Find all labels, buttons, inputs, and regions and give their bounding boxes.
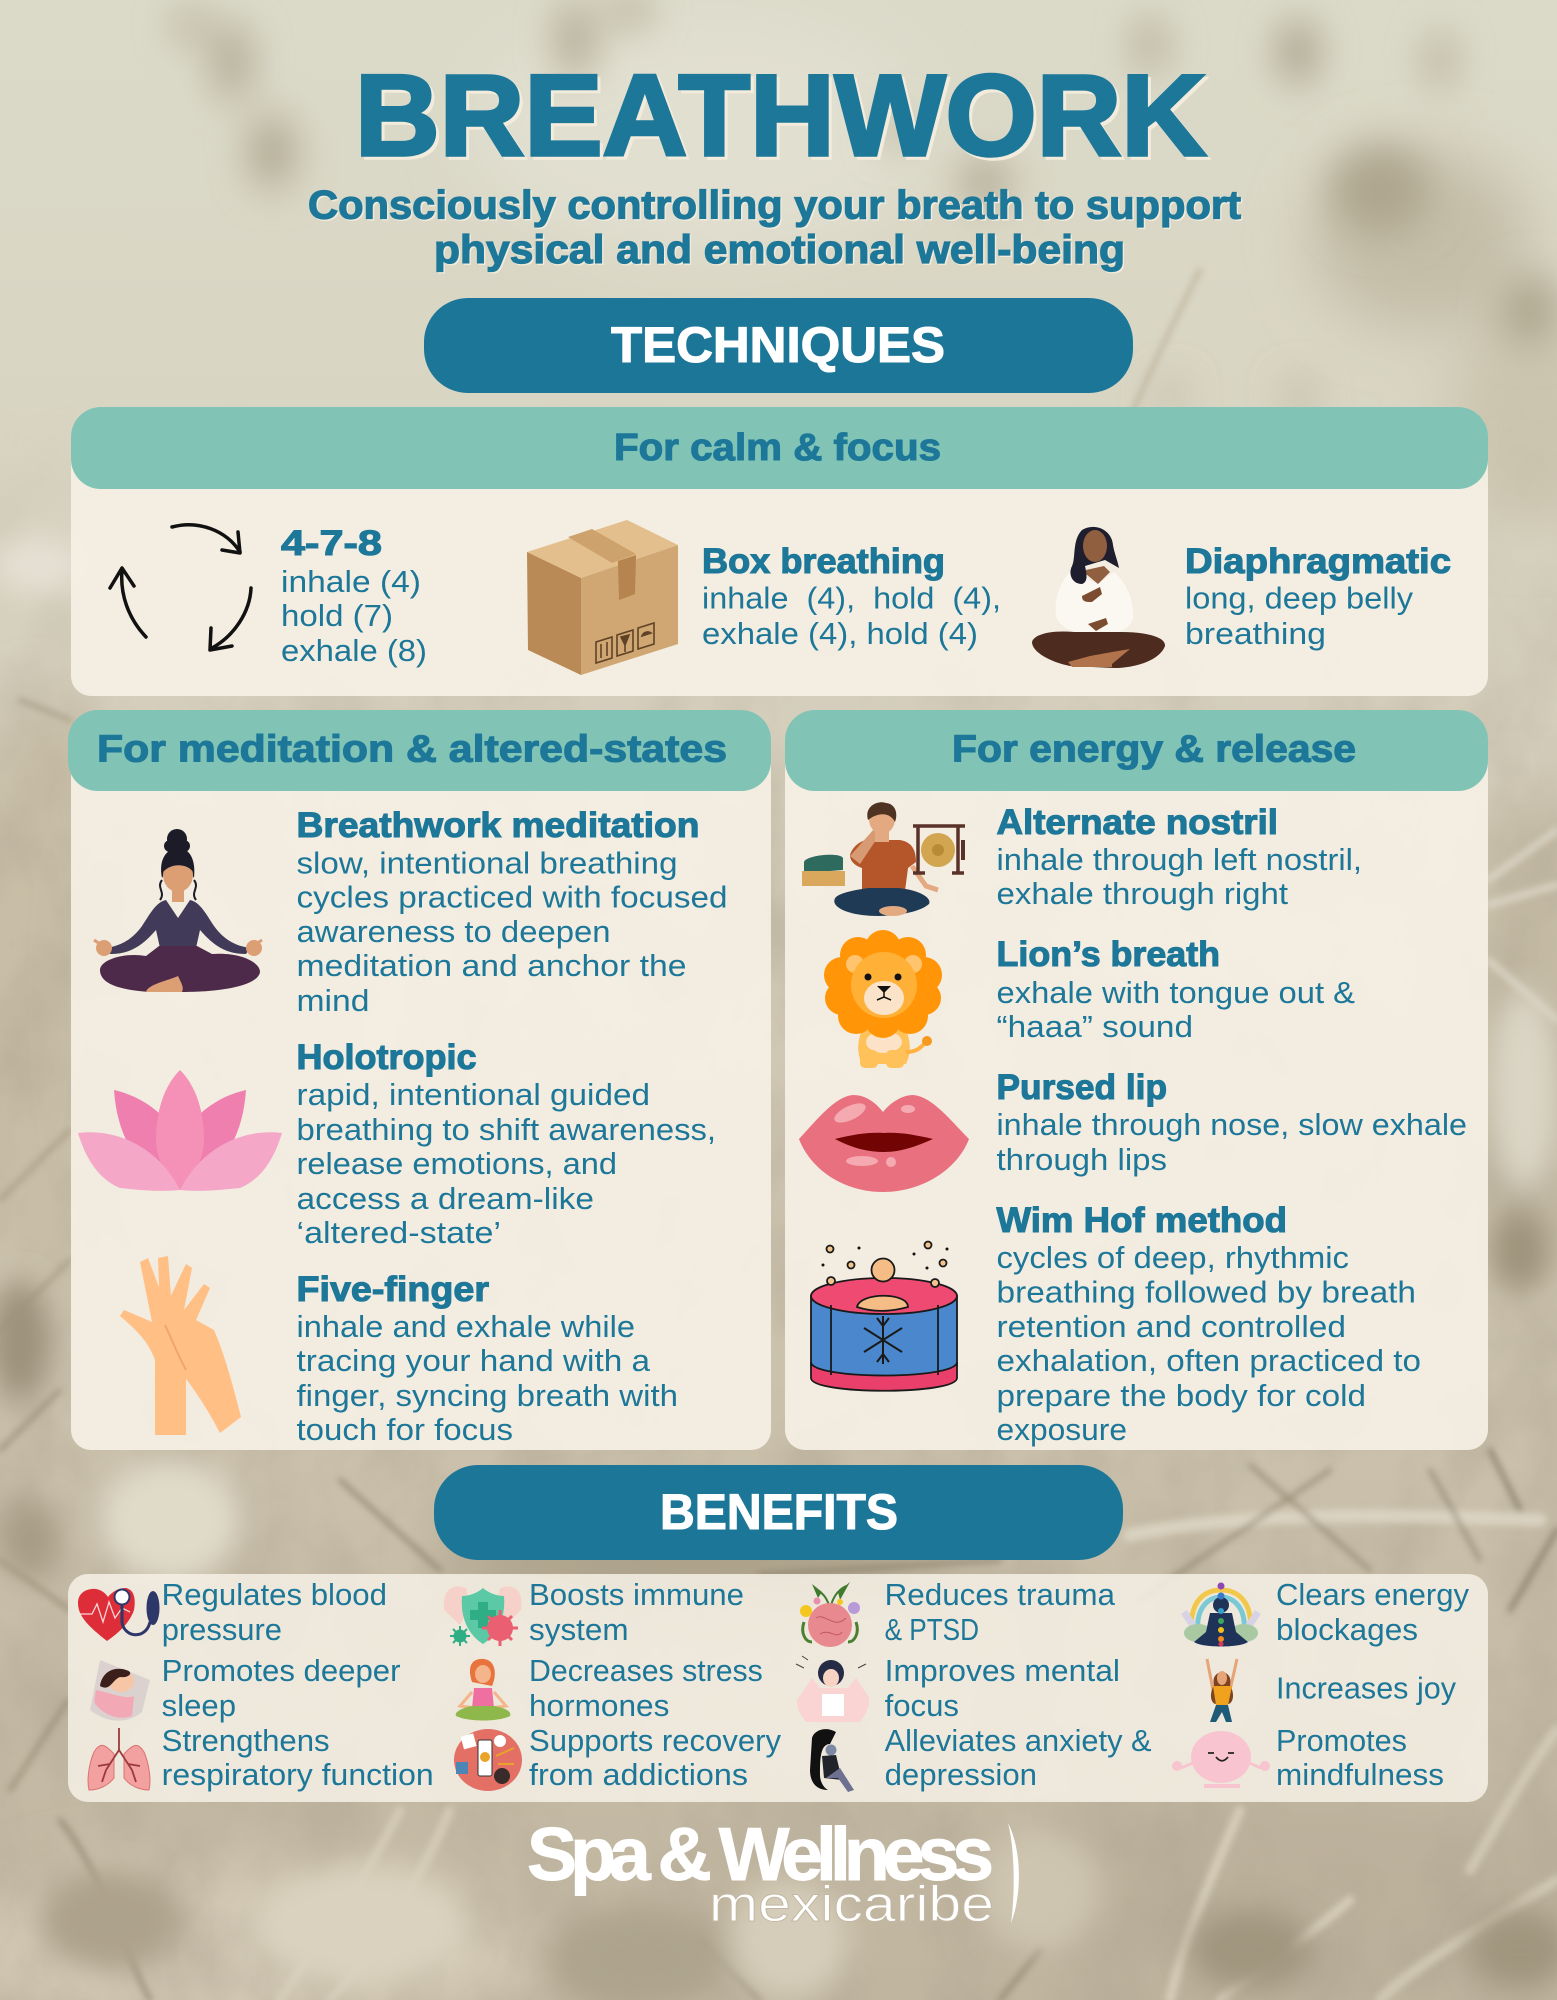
text: regulates blood pressure: [162, 1577, 387, 1647]
text: holotropic: release emotions, and: [296, 1146, 617, 1181]
panel: for meditation and altered-states: [68, 710, 771, 1450]
text: five-finger: touch for focus: [296, 1412, 513, 1447]
icon: immune shield: [444, 1586, 522, 1646]
text: lion's breath: exhale with tongue out &: [996, 975, 1355, 1010]
text: strengthens respiratory function: [162, 1723, 434, 1792]
text: pursed lip: inhale through nose, slow exhale: [996, 1107, 1467, 1142]
icon: meditating brain: [1172, 1731, 1270, 1786]
text: five-finger: tracing your hand with a: [296, 1343, 651, 1378]
subtitle: physical and emotional well-being: [434, 228, 1125, 272]
text: alternate nostril: inhale through left nostril,: [996, 842, 1362, 877]
subtitle: [308, 184, 1242, 274]
icon: brain with flowers: [800, 1582, 860, 1647]
text: wim hof method: exposure: [996, 1412, 1127, 1447]
subtitle: physical and emotional well-being: [436, 230, 1126, 274]
icon: heart with blood pressure cuff: [78, 1588, 160, 1641]
text: alleviates anxiety & depression: [885, 1723, 1152, 1792]
text: promotes deeper sleep: [162, 1653, 400, 1723]
text: promotes mindfulness: [1276, 1723, 1444, 1792]
text: reduces trauma & ptsd: Reduces trauma: [885, 1577, 1116, 1612]
panel header: for energy and release: [785, 710, 1488, 791]
icon: chakra figure: [1184, 1582, 1258, 1646]
text: holotropic: breathing to shift awareness,: [296, 1112, 716, 1147]
text: box breathing: inhale (4), hold (4),: [702, 580, 1001, 616]
text: regulates blood pressure: pressure: [162, 1612, 282, 1647]
text: improves mental focus: Improves mental: [885, 1653, 1120, 1688]
text: wim hof method: Wim Hof method: [996, 1201, 1287, 1240]
text: wim hof method: prepare the body for cold: [996, 1378, 1366, 1413]
text: promotes deeper sleep: Promotes deeper: [162, 1653, 400, 1688]
logo: spa and wellness mexicaribe: mexicaribe: [709, 1876, 994, 1932]
text: boosts immune system: system: [529, 1612, 629, 1647]
text: lion's breath: [996, 935, 1355, 1044]
panel: for energy and release: [785, 710, 1488, 1450]
text: breathwork meditation: meditation and anchor the: [296, 948, 686, 983]
icon: lungs: [88, 1728, 150, 1790]
text: boosts immune system: [529, 1577, 744, 1647]
icon: sleeping person: [90, 1660, 150, 1721]
text: wim hof method: exhalation, often practiced to: [996, 1343, 1421, 1378]
text: pursed lip: [996, 1068, 1467, 1177]
title: BREATHWORK: [355, 52, 1206, 180]
text: diaphragmatic: long, deep belly: [1185, 580, 1414, 616]
text: increases joy: Increases joy: [1276, 1671, 1456, 1706]
title: BREATHWORK: [358, 55, 1209, 183]
panel: for calm and focus: [71, 407, 1488, 696]
text: supports recovery from addictions: [529, 1723, 781, 1792]
icon: meditating woman: [94, 829, 262, 992]
text: five-finger: inhale and exhale while: [296, 1309, 635, 1344]
section pill: benefits: [434, 1465, 1123, 1560]
text: clears energy blockages: [1276, 1577, 1469, 1647]
icon: cardboard box: [527, 520, 678, 675]
text: wim hof method: cycles of deep, rhythmic: [996, 1240, 1349, 1275]
text: promotes deeper sleep: sleep: [162, 1688, 236, 1723]
icon: man alternate nostril breathing: [802, 802, 965, 916]
icon: hands tracing fingers: [120, 1256, 241, 1435]
panel header: for energy and release: For energy & release: [952, 728, 1356, 770]
panel header: for meditation and altered-states: For meditation & altered-states: [97, 728, 727, 770]
text: breathwork meditation: slow, intentional breathing: [296, 846, 678, 880]
section pill: benefits: BENEFITS: [660, 1484, 898, 1540]
text: alleviates anxiety & depression: depression: [885, 1757, 1037, 1792]
text: alternate nostril: exhale through right: [996, 876, 1288, 911]
text: alternate nostril: [996, 803, 1362, 911]
text: wim hof method: retention and controlled: [996, 1309, 1346, 1344]
icon: stressed woman: [796, 1656, 869, 1722]
text: box breathing: Box breathing: [702, 542, 945, 581]
text: boosts immune system: Boosts immune: [529, 1577, 744, 1612]
text: promotes mindfulness: mindfulness: [1276, 1757, 1444, 1792]
text: 4-7-8: inhale (4): [281, 564, 421, 599]
icon: cycle arrows: [110, 525, 251, 650]
text: lion's breath: “haaa” sound: [996, 1009, 1193, 1044]
panel header: for meditation and altered-states: [68, 710, 771, 791]
text: 4-7-8: exhale (8): [281, 633, 427, 668]
icon: cold plunge tub: [811, 1242, 957, 1391]
icon: lotus flower: [78, 1070, 282, 1191]
text: wim hof method: breathing followed by breath: [996, 1274, 1416, 1310]
text: lion's breath: Lion’s breath: [996, 935, 1220, 974]
text: decreases stress hormones: hormones: [529, 1688, 669, 1723]
text: diaphragmatic: Diaphragmatic: [1185, 542, 1451, 581]
text: pursed lip: through lips: [996, 1142, 1167, 1177]
icon: anxious person with dark shadow: [810, 1729, 854, 1792]
section pill: techniques: [424, 298, 1133, 393]
text: reduces trauma & ptsd: & PTSD: [885, 1612, 979, 1647]
icon: addictions circle: [454, 1729, 522, 1791]
text: holotropic: [296, 1038, 716, 1250]
text: regulates blood pressure: Regulates blood: [162, 1577, 387, 1612]
text: improves mental focus: [885, 1653, 1120, 1723]
text: box breathing: exhale (4), hold (4): [702, 616, 978, 651]
text: pursed lip: Pursed lip: [996, 1068, 1167, 1107]
text: supports recovery from addictions: from addictions: [529, 1757, 748, 1792]
icon: seated woman breathing: [1032, 527, 1165, 668]
text: five-finger: Five-finger: [296, 1270, 489, 1309]
text: decreases stress hormones: [529, 1653, 763, 1723]
text: breathwork meditation: cycles practiced with focused: [296, 880, 728, 914]
text: breathwork meditation: mind: [296, 983, 370, 1018]
text: holotropic: access a dream-like: [296, 1181, 594, 1216]
text: promotes mindfulness: Promotes: [1276, 1723, 1407, 1758]
icon: joyful jumping woman: [1207, 1659, 1237, 1722]
logo: spa and wellness mexicaribe: [527, 1812, 1019, 1932]
text: five-finger: finger, syncing breath with: [296, 1378, 678, 1413]
text: strengthens respiratory function: respiratory function: [162, 1757, 434, 1792]
text: improves mental focus: focus: [885, 1688, 959, 1723]
text: five-finger: [296, 1270, 678, 1447]
text: diaphragmatic: breathing: [1185, 616, 1326, 651]
text: reduces trauma & ptsd: [885, 1577, 1116, 1647]
text: breathwork meditation: awareness to deepen: [296, 914, 610, 949]
text: wim hof method: [996, 1201, 1421, 1447]
text: clears energy blockages: blockages: [1276, 1612, 1418, 1647]
text: 4-7-8: 4-7-8: [281, 524, 382, 563]
text: box breathing: [702, 542, 1001, 651]
logo: spa and wellness mexicaribe: Spa & Wellness: [527, 1812, 994, 1896]
panel header: for calm and focus: [71, 407, 1488, 489]
text: clears energy blockages: Clears energy: [1276, 1577, 1469, 1612]
icon: pursed lips: [799, 1095, 969, 1192]
section pill: techniques: TECHNIQUES: [611, 317, 945, 373]
text: 4-7-8: hold (7): [281, 598, 393, 633]
subtitle: Consciously controlling your breath to support: [308, 184, 1241, 228]
text: strengthens respiratory function: Strengthens: [162, 1723, 330, 1758]
subtitle: Consciously controlling your breath to support: [310, 185, 1242, 229]
text: holotropic: ‘altered-state’: [296, 1215, 501, 1250]
text: diaphragmatic: [1185, 542, 1451, 651]
text: breathwork meditation: Breathwork meditation: [296, 806, 700, 845]
text: supports recovery from addictions: Supports recovery: [529, 1723, 781, 1758]
icon: woman in yoga pose: [456, 1659, 510, 1720]
text: alternate nostril: Alternate nostril: [996, 803, 1278, 842]
text: 4-7-8: [281, 524, 427, 668]
text: holotropic: rapid, intentional guided: [296, 1077, 650, 1112]
text: alleviates anxiety & depression: Alleviates anxiety &: [885, 1723, 1152, 1758]
text: holotropic: Holotropic: [296, 1038, 476, 1077]
panel header: for calm and focus: For calm & focus: [614, 427, 941, 469]
text: decreases stress hormones: Decreases stress: [529, 1653, 763, 1688]
text: breathwork meditation: [296, 806, 728, 1018]
panel: benefits: [68, 1574, 1488, 1802]
icon: lion: [824, 930, 942, 1068]
